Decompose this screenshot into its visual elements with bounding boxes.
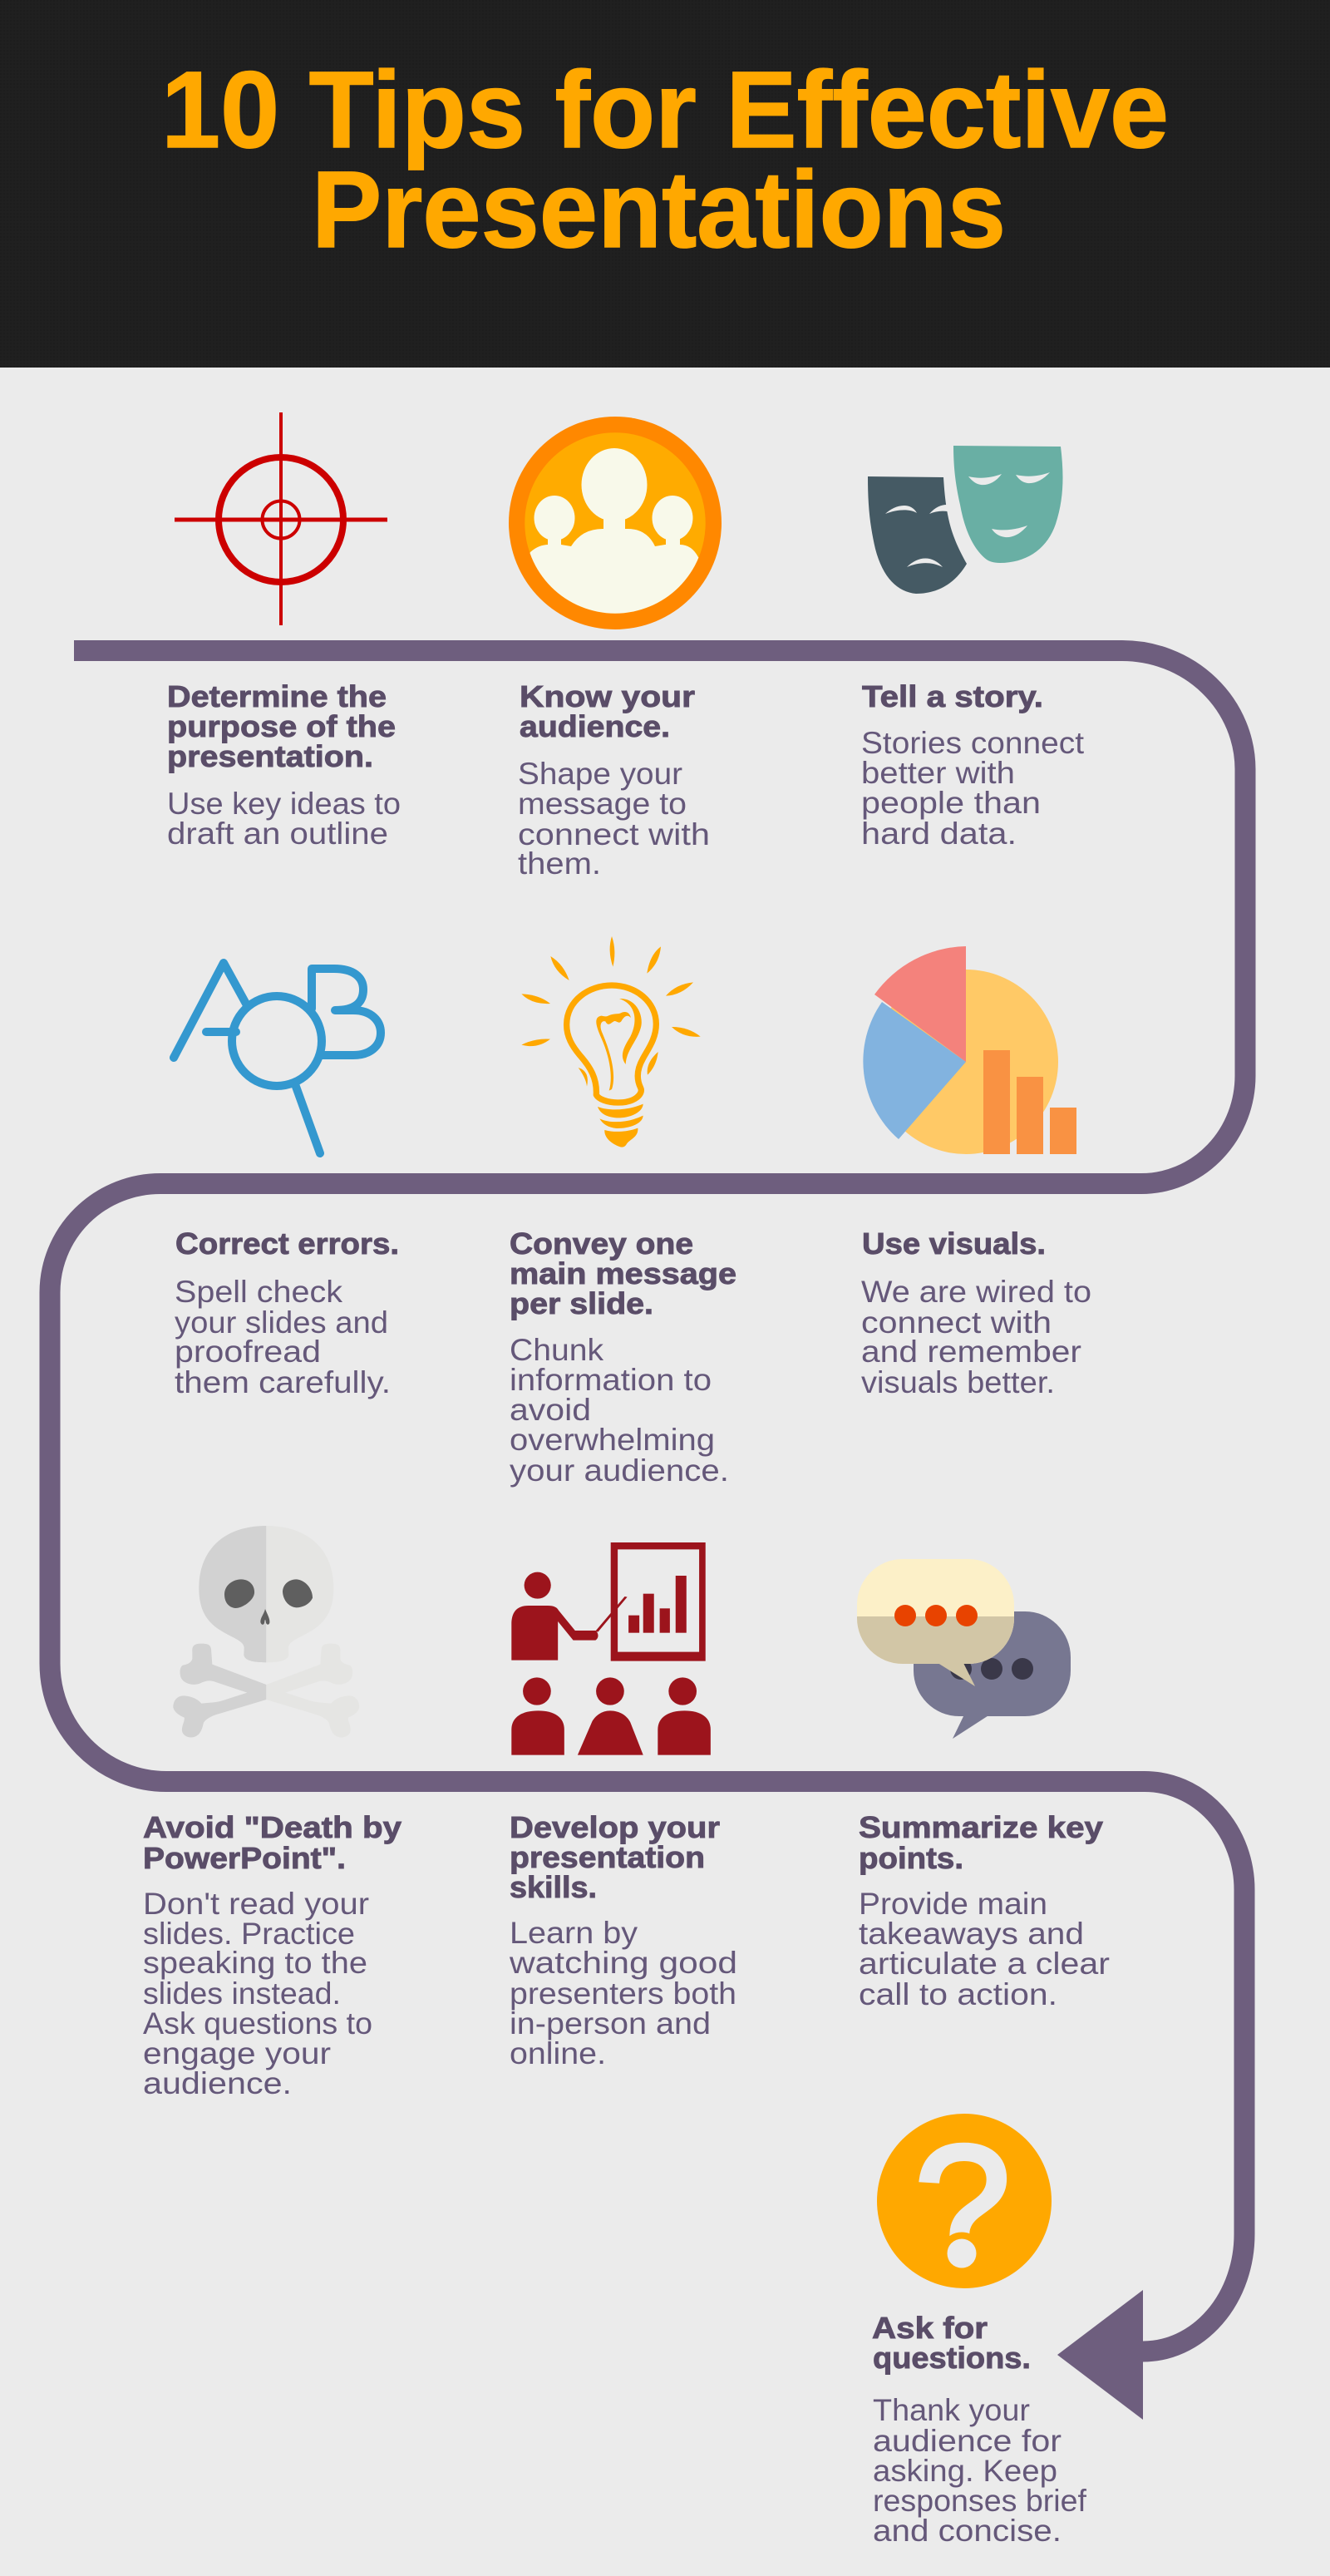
body: tip 5: overwhelming — [510, 1423, 715, 1457]
body: tip 9: takeaways and — [859, 1917, 1084, 1951]
icon: theatre masks — [868, 446, 1062, 594]
tip 8: develop your presentation skills — [509, 1810, 737, 2070]
heading: tip 1: Determine the — [167, 679, 387, 713]
icon: skull and crossbones — [173, 1526, 359, 1738]
body: tip 8: in-person and — [510, 2006, 711, 2041]
body: tip 10: responses brief — [873, 2484, 1087, 2518]
heading: tip 7: PowerPoint". — [143, 1841, 346, 1875]
heading: tip 2: audience. — [520, 709, 670, 743]
tip 1: determine the purpose — [167, 679, 401, 851]
icon: A B magnifier — [174, 963, 381, 1153]
body: tip 8: presenters both — [510, 1976, 736, 2011]
body: tip 6: and remember — [861, 1335, 1081, 1369]
body: tip 7: Ask questions to — [143, 2006, 372, 2041]
body: tip 2: connect with — [518, 817, 710, 851]
icon: pie and bar chart — [863, 946, 1076, 1154]
body: tip 6: connect with — [861, 1305, 1052, 1340]
tip 5: convey one main message — [510, 1226, 736, 1488]
heading: tip 1 — [167, 679, 396, 773]
heading: tip 10: questions. — [873, 2341, 1031, 2375]
body: tip 4: your slides and — [175, 1305, 388, 1340]
body: tip 10: Thank your — [873, 2393, 1030, 2427]
body: tip 4 — [175, 1275, 391, 1399]
heading: tip 10 — [872, 2311, 1031, 2375]
body: tip 7: speaking to the — [143, 1946, 367, 1980]
body: tip 10: asking. Keep — [873, 2454, 1057, 2488]
winding path connector — [50, 650, 1245, 2351]
heading: tip 5 — [510, 1226, 736, 1320]
heading: tip 5: per slide. — [510, 1286, 653, 1320]
left half of skull — [173, 1526, 266, 1738]
body: tip 4: them carefully. — [175, 1365, 391, 1399]
header banner — [0, 0, 1330, 368]
tip 6: use visuals — [861, 1226, 1091, 1399]
body: tip 6: visuals better. — [861, 1365, 1055, 1399]
body: tip 7 — [143, 1887, 372, 2100]
icon: question mark circle — [877, 2110, 1052, 2303]
tip 9: summarize key points — [859, 1810, 1110, 2011]
body: tip 1: draft an outline — [167, 817, 388, 851]
title: 10 Tips for Effective — [161, 48, 1169, 170]
body: tip 1: Use key ideas to — [167, 787, 401, 821]
heading: tip 9: points. — [859, 1841, 963, 1875]
tip 10: ask for questions — [872, 2311, 1087, 2548]
eyes and nose — [224, 1579, 313, 1625]
body: tip 2: Shape your — [518, 757, 682, 791]
body: tip 3: people than — [861, 786, 1041, 820]
body: tip 4: proofread — [175, 1335, 321, 1369]
body: tip 5: information to — [510, 1363, 712, 1397]
heading: tip 9: Summarize key — [859, 1810, 1103, 1844]
body: tip 6 — [861, 1275, 1091, 1399]
body: tip 7: engage your — [143, 2036, 331, 2070]
body: tip 10 — [873, 2393, 1087, 2548]
right half of skull — [266, 1526, 359, 1738]
body: tip 9: articulate a clear — [859, 1947, 1110, 1981]
icon: question mark circle: ? — [914, 2110, 1011, 2303]
heading: tip 6: Use visuals. — [862, 1226, 1046, 1261]
heading: tip 5: Convey one — [510, 1226, 693, 1261]
body: tip 7: Don't read your — [143, 1887, 369, 1921]
heading: tip 3: Tell a story. — [862, 679, 1043, 713]
body: tip 8: watching good — [509, 1946, 737, 1980]
body: tip 3: Stories connect — [861, 726, 1085, 760]
icon: light bulb — [521, 936, 701, 1147]
body: tip 8: online. — [510, 2036, 606, 2070]
heading: tip 1: purpose of the — [167, 709, 396, 743]
body: tip 8: Learn by — [510, 1916, 638, 1950]
heading: tip 8: presentation — [510, 1840, 705, 1874]
heading: tip 10: Ask for — [872, 2311, 988, 2345]
tip 4: correct errors — [175, 1226, 399, 1399]
body: tip 9 — [859, 1887, 1110, 2011]
body: tip 10: audience for — [873, 2424, 1062, 2458]
arrow head — [1057, 2290, 1143, 2420]
tip 3: tell a story — [861, 679, 1085, 851]
heading: tip 8: skills. — [510, 1870, 597, 1904]
body: tip 8 — [509, 1916, 737, 2070]
body: tip 9: call to action. — [859, 1977, 1057, 2011]
tip 7: avoid death by powerpoint — [143, 1810, 401, 2100]
body: tip 5 — [510, 1333, 729, 1488]
body: tip 6: We are wired to — [861, 1275, 1091, 1309]
heading: tip 2 — [520, 679, 695, 743]
body: tip 3: better with — [861, 756, 1015, 790]
heading: tip 7: Avoid "Death by — [143, 1810, 401, 1844]
body: tip 2: message to — [518, 787, 687, 821]
body: tip 7: slides. Practice — [143, 1917, 355, 1951]
body: tip 7: audience. — [143, 2066, 292, 2100]
heading: tip 5: main message — [510, 1256, 736, 1290]
body: tip 4: Spell check — [175, 1275, 343, 1309]
body: tip 3: hard data. — [861, 817, 1017, 851]
body: tip 1 — [167, 787, 401, 851]
icon: audience group — [509, 417, 722, 629]
icon: speech bubbles — [857, 1559, 1071, 1739]
tip 2: know your audience — [518, 679, 710, 881]
icon: presenter and audience — [511, 1542, 711, 1755]
icon: target crosshair — [175, 412, 387, 625]
title — [161, 48, 1169, 270]
body: tip 9: Provide main — [859, 1887, 1047, 1921]
body: tip 2 — [518, 757, 710, 881]
heading: tip 4: Correct errors. — [175, 1226, 399, 1261]
body: tip 5: your audience. — [510, 1453, 729, 1488]
body: tip 2: them. — [518, 846, 601, 881]
heading: tip 1: presentation. — [167, 739, 373, 773]
body: tip 3 — [861, 726, 1085, 851]
heading: tip 7 — [143, 1810, 401, 1875]
heading: tip 8: Develop your — [510, 1810, 720, 1844]
title: Presentations — [312, 148, 1006, 270]
body: tip 7: slides instead. — [143, 1976, 341, 2011]
heading: tip 9 — [859, 1810, 1103, 1875]
body: tip 5: avoid — [510, 1393, 591, 1427]
heading: tip 8 — [510, 1810, 720, 1904]
body: tip 5: Chunk — [510, 1333, 604, 1367]
heading: tip 2: Know your — [520, 679, 695, 713]
body: tip 10: and concise. — [873, 2514, 1062, 2548]
